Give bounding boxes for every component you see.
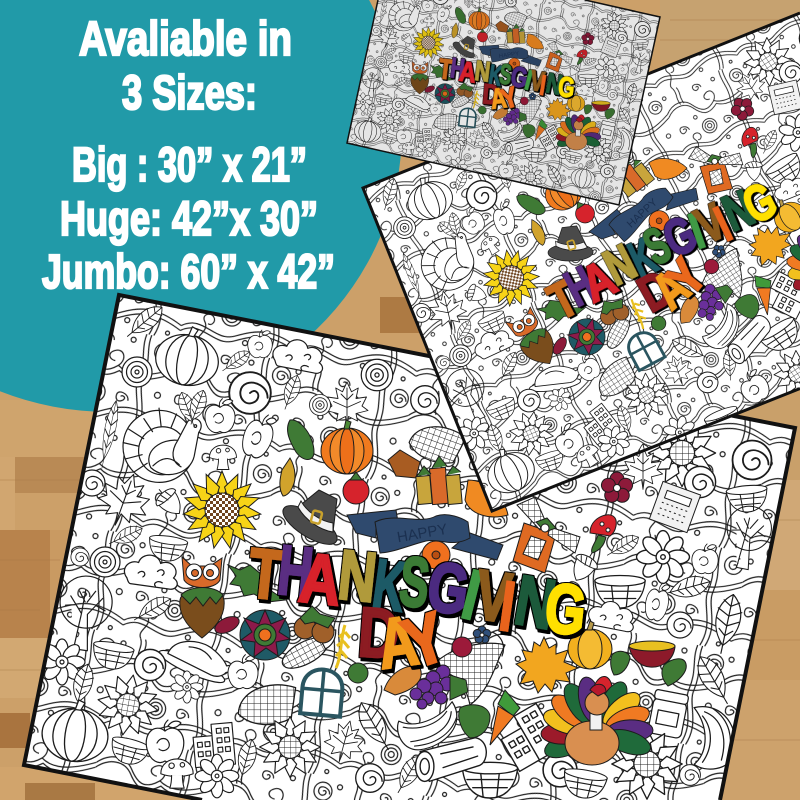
icon: sunflower bbox=[182, 471, 262, 550]
poster title: Thanksgiving Day: G bbox=[541, 569, 590, 651]
icon: orange flower bbox=[422, 541, 450, 569]
icon: calendar bbox=[649, 481, 701, 533]
poster title: Thanksgiving Day: N bbox=[473, 56, 492, 88]
icon: hazelnuts bbox=[294, 606, 335, 643]
poster title: Thanksgiving Day bbox=[245, 530, 590, 684]
poster title: Thanksgiving Day: I bbox=[455, 556, 488, 635]
poster border bbox=[24, 295, 795, 800]
icon: wheat bbox=[336, 625, 350, 668]
poster title: Thanksgiving Day: H bbox=[449, 53, 466, 86]
poster title: Thanksgiving Day: H bbox=[274, 530, 317, 612]
poster title: Thanksgiving Day bbox=[436, 49, 576, 118]
poster title: Thanksgiving Day: N bbox=[335, 536, 380, 618]
outline doodles: right half bbox=[394, 418, 775, 800]
poster title: Thanksgiving Day: I bbox=[538, 70, 548, 102]
poster title: Thanksgiving Day: I bbox=[682, 202, 711, 260]
icon: chicken leg bbox=[384, 666, 421, 695]
poster title: Thanksgiving Day: S bbox=[498, 58, 513, 91]
corn outline bbox=[278, 625, 344, 674]
icon: teal window bbox=[300, 668, 344, 717]
poster title: Thanksgiving Day: HAPPY bbox=[625, 196, 661, 230]
icon: red mushroom bbox=[590, 515, 616, 553]
icon: green leaves near bowl bbox=[611, 651, 686, 686]
poster artwork bbox=[24, 295, 795, 800]
heading line 1: Avaliable in bbox=[79, 13, 292, 66]
icon: coloured houses bbox=[416, 456, 462, 505]
icon: yellow maple leaf bbox=[516, 637, 578, 693]
poster title: Thanksgiving Day: G bbox=[734, 172, 786, 235]
icon: orange pumpkin bbox=[321, 420, 373, 474]
heading line 2: 3 Sizes: bbox=[122, 67, 257, 120]
poster title: Thanksgiving Day: Y bbox=[497, 80, 522, 115]
poster title: Thanksgiving Day: N bbox=[714, 179, 762, 242]
poster title: Thanksgiving Day: I bbox=[522, 65, 535, 97]
poster title: Thanksgiving Day: A bbox=[489, 83, 508, 115]
teal size badge bbox=[0, 0, 402, 412]
poster title: Thanksgiving Day: V bbox=[471, 556, 516, 638]
poster title: Thanksgiving Day: Y bbox=[393, 596, 456, 683]
icon: pilgrim hat bbox=[277, 490, 343, 552]
poster title: Thanksgiving Day: T bbox=[245, 534, 286, 615]
ribbon text: HAPPY bbox=[396, 521, 449, 546]
poster title: Thanksgiving Day: HAPPY bbox=[499, 51, 520, 60]
poster title: Thanksgiving Day: K bbox=[487, 59, 504, 92]
icon: colourful turkey bbox=[540, 675, 654, 765]
icon: green oak leaf bbox=[228, 565, 285, 602]
poster title: Thanksgiving Day: N bbox=[509, 562, 561, 645]
poster title: Thanksgiving Day: T bbox=[437, 54, 454, 86]
icon: red apple bbox=[343, 472, 369, 504]
poster title: Thanksgiving Day: N bbox=[543, 68, 565, 102]
poster title: Thanksgiving Day: V bbox=[528, 66, 547, 98]
outline doodles: left half bbox=[39, 301, 439, 798]
icon: oak leaf bbox=[280, 458, 295, 496]
poster title: Thanksgiving Day: K bbox=[368, 545, 410, 627]
icon: red berry bbox=[452, 637, 472, 657]
poster: huge (middle) bbox=[305, 0, 800, 533]
icon: ribbon bbox=[347, 510, 503, 560]
poster title: Thanksgiving Day: G bbox=[423, 547, 474, 631]
poster title: Thanksgiving Day: D bbox=[481, 79, 500, 111]
cornucopia bbox=[430, 632, 505, 705]
poster title: Thanksgiving Day: A bbox=[641, 258, 700, 320]
icon: dark green leaf bbox=[459, 705, 490, 738]
poster title: Thanksgiving Day: N bbox=[595, 235, 645, 296]
icon: carrot bbox=[490, 690, 520, 745]
poster title: Thanksgiving Day: K bbox=[620, 227, 665, 288]
poster title: Thanksgiving Day: I bbox=[707, 197, 740, 252]
poster title: Thanksgiving Day: G bbox=[556, 72, 576, 104]
poster title: Thanksgiving Day: S bbox=[396, 542, 433, 623]
icon: soup bowl bbox=[629, 641, 675, 667]
poster title: Thanksgiving Day: H bbox=[557, 256, 604, 318]
poster: big size sample (back, smallest) bbox=[347, 0, 661, 210]
heading: available sizes bbox=[42, 13, 335, 299]
icon: yellow pumpkin bbox=[568, 621, 612, 669]
poster title: Thanksgiving Day: G bbox=[655, 206, 705, 268]
poster title: Thanksgiving Day: Y bbox=[654, 248, 717, 306]
poster title: Thanksgiving Day bbox=[529, 140, 800, 375]
poster title: Thanksgiving Day: V bbox=[688, 194, 734, 255]
poster title: Thanksgiving Day: A bbox=[373, 601, 423, 684]
icon: bread bbox=[388, 450, 420, 478]
icon: sweet potato bbox=[212, 613, 242, 637]
poster title: Thanksgiving Day: S bbox=[635, 216, 679, 276]
poster: big (front) bbox=[24, 295, 795, 800]
size: huge: Huge: 42”x 30” bbox=[60, 193, 318, 246]
poster title: Thanksgiving Day: G bbox=[509, 62, 529, 95]
size: big: Big : 30” x 21” bbox=[72, 139, 307, 192]
size: jumbo: Jumbo: 60” x 42” bbox=[42, 246, 335, 299]
icon: blue flower bbox=[472, 626, 492, 645]
icon: mandala bbox=[240, 610, 290, 660]
icon: green leaf bbox=[288, 420, 314, 460]
poster title: Thanksgiving Day: D bbox=[628, 258, 682, 323]
icon: windmill bbox=[513, 497, 580, 573]
poster title: Thanksgiving Day: T bbox=[539, 269, 587, 331]
icon: red flower bbox=[600, 472, 634, 505]
icon: owl bbox=[180, 557, 224, 638]
poster title: Thanksgiving Day: A bbox=[296, 538, 345, 620]
icon: orange slice bbox=[465, 480, 508, 517]
poster title: Thanksgiving Day: I bbox=[495, 566, 520, 646]
poster title: Thanksgiving Day: A bbox=[572, 249, 625, 313]
poster title: Thanksgiving Day: A bbox=[457, 56, 478, 89]
icon: green spiral bbox=[348, 663, 368, 683]
icon: grapes bbox=[410, 665, 468, 709]
poster title: Thanksgiving Day: D bbox=[356, 594, 401, 674]
